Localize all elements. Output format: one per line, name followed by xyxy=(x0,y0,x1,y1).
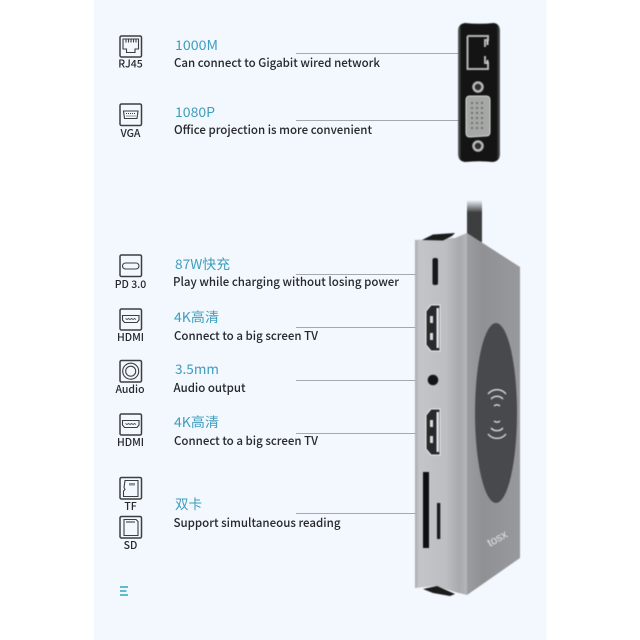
description: Audio output xyxy=(174,379,246,396)
heading: 4K: 4K高清 xyxy=(174,306,219,326)
row: card slots xyxy=(120,478,341,553)
front face xyxy=(415,233,467,595)
icon: HDMI port xyxy=(120,414,142,435)
description: Can connect to Gigabit wired network xyxy=(174,54,380,71)
heading: 4K: 4K高清 xyxy=(174,411,219,431)
upper screw xyxy=(474,82,482,92)
HDMI port 1 xyxy=(426,305,440,351)
side face xyxy=(467,233,520,595)
label: PD 3.0: PD 3.0 xyxy=(115,277,146,292)
audio jack xyxy=(428,375,438,385)
row: Audio xyxy=(115,358,246,397)
heading: 1080P: 1080P xyxy=(175,101,215,121)
icon: SD card xyxy=(120,516,142,538)
description: Office projection is more convenient xyxy=(174,121,372,138)
SD slot xyxy=(423,472,429,548)
top dock: RJ45 and VGA end xyxy=(458,23,500,162)
label: Audio: Audio xyxy=(115,382,145,397)
top rubber cap xyxy=(422,233,455,240)
heading: 1000M: 1000M xyxy=(175,34,218,54)
icon: audio jack xyxy=(120,360,142,382)
HDMI port 2 xyxy=(426,409,440,455)
icon: VGA port xyxy=(120,104,142,126)
label: HDMI: HDMI xyxy=(117,435,144,450)
description: Connect to a big screen TV xyxy=(174,327,319,344)
label: RJ45: RJ45 xyxy=(118,56,143,72)
icon: TF card xyxy=(120,478,142,499)
description: Connect to a big screen TV xyxy=(174,432,319,449)
row: VGA xyxy=(120,101,372,141)
label: VGA: VGA xyxy=(120,126,141,141)
menu icon xyxy=(120,587,128,595)
dock body xyxy=(458,23,500,162)
connector lines xyxy=(296,54,462,514)
heading: dual card: 双卡 xyxy=(175,493,202,513)
background panel xyxy=(94,0,546,640)
USB-C port xyxy=(432,258,438,285)
heading: 87W: 87W快充 xyxy=(175,253,230,273)
description: Play while charging without losing power xyxy=(173,273,399,290)
wireless waves down xyxy=(488,421,506,438)
icon: USB-C port xyxy=(120,255,142,276)
row: HDMI 2 xyxy=(117,411,319,450)
row: PD 3.0 xyxy=(115,253,399,292)
lower screw xyxy=(474,142,482,150)
wireless charging pad xyxy=(475,323,517,503)
RJ45 socket xyxy=(468,36,488,69)
icon: RJ45 port xyxy=(120,36,142,57)
brand logo: tosx xyxy=(486,529,510,550)
icon: HDMI port xyxy=(120,309,142,330)
VGA socket xyxy=(466,96,490,137)
bottom rubber cap xyxy=(423,586,455,596)
row: HDMI 1 xyxy=(117,306,319,345)
row: RJ45 xyxy=(118,34,380,72)
wireless waves up xyxy=(488,390,506,406)
heading: 3.5mm: 3.5mm xyxy=(175,358,219,378)
TF slot xyxy=(437,503,440,539)
RJ45 status lights xyxy=(486,40,488,64)
description: Support simultaneous reading xyxy=(174,514,341,531)
label: HDMI: HDMI xyxy=(117,330,144,345)
label: TF: TF xyxy=(124,499,137,514)
main hub device xyxy=(415,200,520,596)
cable xyxy=(467,200,482,242)
label: SD: SD xyxy=(124,538,137,553)
